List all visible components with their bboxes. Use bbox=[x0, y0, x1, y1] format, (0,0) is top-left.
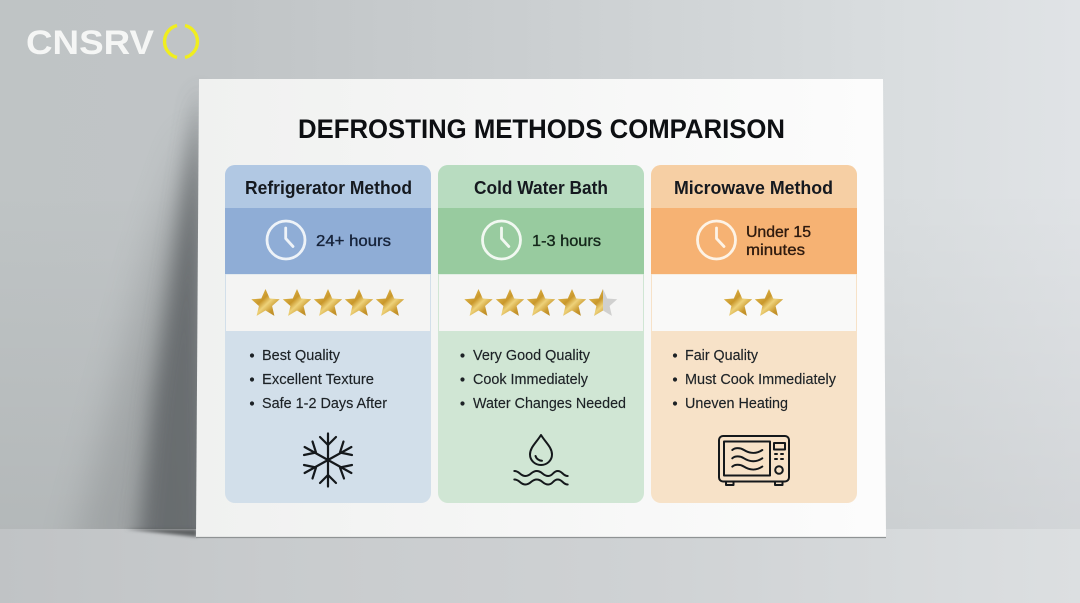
heading: Refrigerator Method bbox=[245, 178, 412, 198]
panel: refrigerator method bbox=[225, 165, 431, 503]
feature list: Safe 1-2 Days After bbox=[262, 396, 387, 412]
feature list: Must Cook Immediately bbox=[685, 372, 837, 388]
logo ring bbox=[165, 26, 197, 58]
icon: clock bbox=[698, 221, 736, 259]
time label: Under 15 bbox=[746, 224, 811, 241]
heading: Microwave Method bbox=[674, 178, 833, 198]
icon: microwave bbox=[719, 436, 789, 485]
panel: microwave method bbox=[651, 165, 857, 503]
feature list: Fair Quality bbox=[685, 348, 759, 364]
feature list bbox=[673, 348, 837, 412]
heading: Cold Water Bath bbox=[474, 178, 608, 198]
icon: snowflake bbox=[304, 434, 352, 486]
feature list: Cook Immediately bbox=[473, 372, 589, 388]
logo wordmark: CNSRV bbox=[26, 24, 154, 62]
time label: minutes bbox=[746, 242, 805, 259]
icon: water drop and waves bbox=[514, 435, 568, 484]
board shadow bbox=[70, 84, 212, 560]
feature list: Best Quality bbox=[262, 348, 341, 364]
feature list: Very Good Quality bbox=[473, 348, 591, 364]
logo bbox=[26, 24, 197, 62]
feature list bbox=[250, 348, 387, 412]
feature list bbox=[460, 348, 626, 412]
white board bbox=[196, 79, 886, 538]
rating: 4.5 stars bbox=[464, 289, 617, 316]
time label: 24+ hours bbox=[316, 233, 391, 250]
title: DEFROSTING METHODS COMPARISON bbox=[298, 114, 785, 144]
time label: 1-3 hours bbox=[532, 233, 601, 250]
feature list: Water Changes Needed bbox=[473, 396, 626, 412]
panel: cold water bath bbox=[438, 165, 644, 503]
floor bbox=[0, 529, 1080, 603]
rating: 2 stars bbox=[724, 289, 783, 316]
icon: clock bbox=[267, 221, 305, 259]
rating: 5 stars bbox=[251, 289, 404, 316]
icon: clock bbox=[482, 221, 520, 259]
feature list: Uneven Heating bbox=[685, 396, 788, 412]
floor contact shadow bbox=[125, 529, 197, 537]
feature list: Excellent Texture bbox=[262, 372, 374, 388]
